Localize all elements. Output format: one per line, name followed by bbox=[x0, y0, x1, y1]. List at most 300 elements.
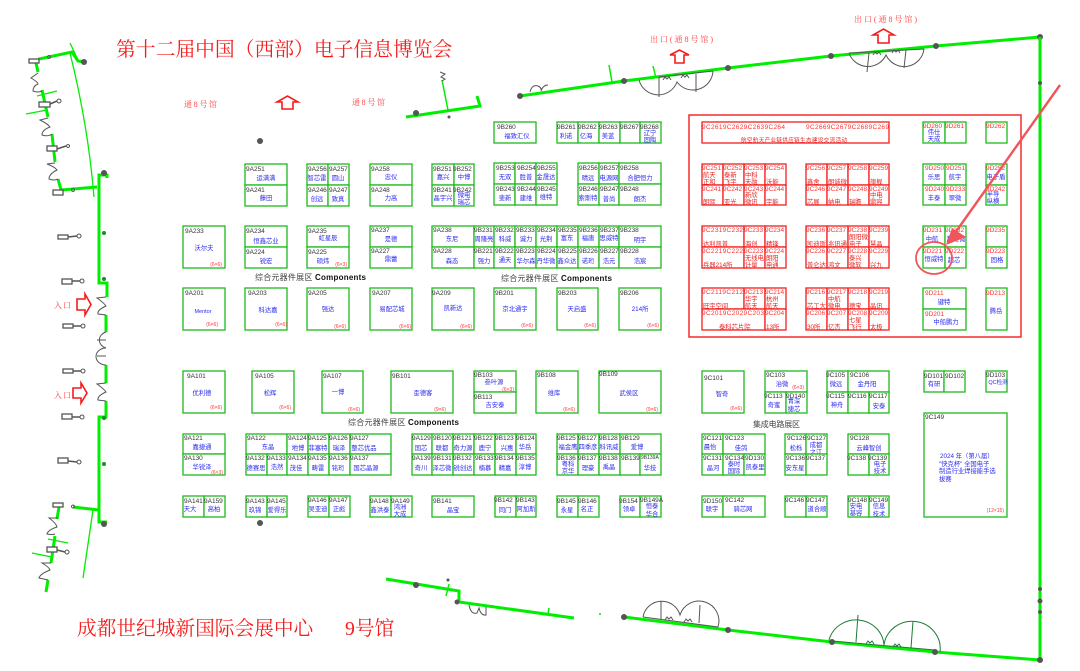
booth 9C253: 天融 bbox=[745, 177, 758, 186]
booth 9C121 bbox=[702, 434, 723, 454]
booth 9B225: 鑫众达 bbox=[558, 256, 577, 265]
booth 9C228: 9C228 bbox=[848, 248, 868, 255]
booth 9B146: 名正 bbox=[581, 504, 593, 513]
booth 9A141: 天大 bbox=[184, 504, 197, 513]
booth 9A143: 9A143 bbox=[246, 498, 265, 505]
booth 9B139A: 华技 bbox=[644, 463, 657, 472]
booth 9C254: 沃能 bbox=[766, 177, 779, 186]
booth 9D140: 捷芯 bbox=[788, 404, 800, 413]
booth 9C106 bbox=[848, 371, 889, 392]
booth 9C149 competition: 拔赛 bbox=[939, 474, 952, 483]
booth 9C238: 9C238 bbox=[848, 227, 868, 234]
booth 9C261-9C269: 9C2669C2679C2689C269 bbox=[806, 124, 889, 131]
booth 9B113 bbox=[474, 392, 516, 413]
booth 9C252: 9C252 bbox=[723, 165, 743, 172]
booth 9C138: 9C138 bbox=[847, 455, 867, 462]
booth 9A258 bbox=[370, 164, 412, 185]
dock doors bbox=[29, 56, 85, 554]
booth 9D262: 9D262 bbox=[986, 123, 1006, 130]
booth 9C231-9C232: 达利凯普 bbox=[703, 239, 728, 248]
booth 9B203: 天启盛 bbox=[568, 304, 586, 313]
booth 9B134: 9B134 bbox=[495, 455, 514, 462]
booth 9A205: 强达 bbox=[322, 304, 335, 313]
booth 9A105: (6×6) bbox=[279, 405, 291, 411]
booth 9C207: 亿杰 bbox=[828, 322, 841, 331]
booth 9C106: 9C106 bbox=[850, 372, 870, 379]
booth 9A224: 9A224 bbox=[246, 249, 265, 256]
booth 9C239: 9C239 bbox=[869, 227, 889, 234]
booth 9A256 bbox=[307, 164, 328, 185]
booth 9B241: 晶宇兴 bbox=[434, 193, 452, 202]
booth 9B253: 9B253 bbox=[496, 165, 515, 172]
booth 9C242: 9C242 bbox=[723, 186, 743, 193]
booth 9D252 bbox=[986, 164, 1007, 185]
booth 9B252 bbox=[453, 164, 474, 185]
booth 9B244: 建维 bbox=[520, 193, 533, 202]
booth 9B243 bbox=[494, 184, 515, 205]
booth 9A129: 国芯 bbox=[415, 443, 427, 452]
booth 9A107: 9A107 bbox=[323, 373, 342, 380]
booth 9B127 bbox=[578, 434, 599, 454]
booth 9A237 bbox=[370, 226, 412, 247]
booth 9A143 bbox=[246, 496, 267, 517]
callout: highlight circle bbox=[916, 242, 952, 274]
booth 9A107: 一博 bbox=[332, 387, 345, 396]
booth 9B101: 歪德客 bbox=[414, 388, 433, 397]
booth 9B252: 9B252 bbox=[453, 166, 472, 173]
booth 9B103: 叁叶源 bbox=[485, 377, 504, 386]
booth 9A247: 9A247 bbox=[329, 187, 348, 194]
booth 9A233: 沃尔夫 bbox=[195, 243, 214, 252]
booth 9A148: 9A148 bbox=[370, 498, 389, 505]
booth 9A238: 东尼 bbox=[446, 234, 458, 243]
booth 9B206: 214所 bbox=[632, 304, 649, 313]
booth 9C229 bbox=[869, 247, 889, 269]
booth 9B146: 9B146 bbox=[578, 498, 597, 505]
booth 9B129: 9B129 bbox=[621, 435, 640, 442]
booth 9A209: 9A209 bbox=[432, 290, 451, 297]
booth 9B109 bbox=[599, 371, 661, 413]
booth 9C115 bbox=[826, 392, 848, 413]
booth 9B143: 9B143 bbox=[516, 497, 535, 504]
booth 9C127 bbox=[806, 434, 827, 456]
booth 9C103 bbox=[765, 371, 807, 392]
booth 9B125: 福金鹰 bbox=[559, 442, 577, 451]
booth 9C139: 电子 bbox=[874, 459, 886, 468]
booth 9B238 bbox=[619, 226, 661, 247]
booth 9B235: 9B235 bbox=[558, 227, 577, 234]
booth 9C241: 9C241 bbox=[702, 186, 722, 193]
booth 9A256: 9A256 bbox=[308, 166, 327, 173]
booth 9C248: 瑞瞻 bbox=[849, 197, 862, 206]
zone label: components upper centre: 综合元器件展区 Components bbox=[501, 273, 613, 283]
booth 9B242: 9B242 bbox=[453, 187, 472, 194]
booth 9C149 competition: (12×15) bbox=[987, 508, 1004, 514]
booth 9D221: 恒威特 bbox=[925, 254, 944, 263]
booth 9C121: 9C121 bbox=[703, 435, 723, 442]
booth 9B227: 浩元 bbox=[603, 256, 616, 265]
booth 9B121: 9B121 bbox=[453, 435, 472, 442]
exit arrow 2 bbox=[854, 14, 917, 43]
booth 9C252 bbox=[723, 164, 744, 186]
booth 9B201: 9B201 bbox=[495, 290, 514, 297]
booth 9C257: 9C257 bbox=[827, 165, 847, 172]
booth 9D261 bbox=[945, 122, 966, 143]
booth 9B237: 思威特 bbox=[600, 233, 619, 242]
booth 9A132: 9A132 bbox=[246, 455, 265, 462]
booth 9D223 bbox=[986, 247, 1007, 268]
booth 9C219 bbox=[869, 288, 889, 310]
booth 9C149 competition bbox=[924, 413, 1007, 517]
booth 9A251: 运满满 bbox=[257, 173, 275, 182]
booth 9C204 bbox=[765, 309, 786, 331]
booth 9B268: 辽宁 bbox=[644, 128, 656, 137]
booth 9D221 bbox=[923, 247, 945, 268]
booth 9A258: 忠仪 bbox=[385, 173, 398, 181]
booth 9B138: 禹晶 bbox=[603, 463, 615, 471]
booth 9A235: 9A235 bbox=[308, 228, 327, 235]
booth 9C238: 朗阳微 bbox=[849, 232, 869, 241]
booth 9B243: 斐新 bbox=[499, 193, 512, 202]
booth 9B231 bbox=[474, 226, 494, 247]
booth 9B254 bbox=[515, 163, 536, 184]
booth 9C261-9C269: 9C2619C2629C2639C264 bbox=[702, 124, 785, 131]
booth 9C227 bbox=[827, 247, 848, 269]
booth 9B136 bbox=[557, 454, 578, 475]
booth 9C216 bbox=[806, 288, 827, 310]
booth 9A139 bbox=[412, 454, 432, 475]
booth 9B206 bbox=[619, 288, 661, 330]
booth 9C211-9C212: 旺宇空间 bbox=[703, 301, 728, 310]
booth 9C229: 兴九 bbox=[870, 260, 883, 269]
booth 9B113: 吉安泰 bbox=[486, 400, 505, 409]
booth 9C204: 9C204 bbox=[765, 310, 785, 317]
booth 9B256 bbox=[578, 163, 599, 184]
panel: components zone upper centre bbox=[474, 122, 661, 330]
booth 9C229: 9C229 bbox=[869, 248, 889, 255]
booth 9C148: 安电 bbox=[850, 501, 863, 510]
hall walls: bottom bbox=[386, 578, 1043, 663]
booth 9A251 bbox=[245, 164, 287, 185]
booth 9C249: 鼎容 bbox=[870, 197, 883, 206]
passage label to hall 8: 通8号馆 bbox=[352, 97, 385, 107]
booth 9C218: 德宝 bbox=[849, 301, 862, 310]
booth 9C149 competition: 制造行业焊接能手选 bbox=[939, 466, 996, 475]
booth 9C101: 智奇 bbox=[716, 389, 728, 398]
booth 9B268: 9B268 bbox=[640, 124, 659, 131]
booth 9B238: 明宇 bbox=[634, 235, 646, 244]
booth 9A201: Mentor bbox=[194, 309, 212, 315]
booth 9C139: 9C139 bbox=[868, 455, 888, 462]
booth 9D211: 9D211 bbox=[925, 290, 944, 297]
booth 9C234: 精锋 bbox=[766, 239, 779, 248]
booth 9B225 bbox=[557, 247, 578, 268]
booth 9D201: 9D201 bbox=[925, 311, 945, 318]
booth 9C149 small: 信息 bbox=[873, 501, 885, 510]
passage arrow to hall 8 bbox=[184, 96, 298, 109]
panel: integrated circuit zone bbox=[702, 371, 1008, 518]
booth 9A101 bbox=[183, 371, 225, 413]
booth 9D140: 青深 bbox=[788, 396, 800, 405]
booth 9C243 bbox=[744, 185, 765, 206]
booth 9B235 bbox=[557, 226, 578, 247]
booth 9A130: (6×3) bbox=[211, 470, 223, 476]
booth 9B222: 9B222 bbox=[495, 248, 514, 255]
booth 9C136: 9C136 bbox=[786, 455, 806, 462]
booth 9C241 bbox=[702, 185, 723, 206]
booth 9B145: 9B145 bbox=[557, 498, 576, 505]
booth 9C116: 9C116 bbox=[848, 393, 867, 400]
booth 9B139A: 9B139A bbox=[641, 455, 659, 461]
booth 9B238: 9B238 bbox=[620, 227, 639, 234]
booth 9D262 bbox=[986, 122, 1007, 143]
booth 9A228 bbox=[432, 247, 474, 268]
booth 9A141: 9A141 bbox=[184, 498, 203, 505]
booth 9A137: 9A137 bbox=[350, 455, 369, 462]
booth 9A225: 硕炜 bbox=[317, 256, 329, 265]
booth 9D222: 9D222 bbox=[945, 248, 965, 255]
booth 9C256: 9C256 bbox=[806, 165, 826, 172]
booth 9B154: 9B154 bbox=[619, 498, 638, 505]
booth 9A101: 9A101 bbox=[187, 373, 206, 380]
booth 9C216: 9C216 bbox=[806, 289, 826, 296]
booth 9A251: 9A251 bbox=[246, 166, 265, 173]
booth 9B257: 电源网 bbox=[600, 173, 618, 182]
entrance arrow 1: 入口 bbox=[54, 300, 71, 310]
booth 9B245: 9B245 bbox=[537, 186, 556, 193]
booth 9C139: 技术 bbox=[874, 466, 887, 475]
booth 9C123: 9C123 bbox=[725, 435, 745, 442]
booth 9B133: 9B133 bbox=[475, 455, 494, 462]
booth 9C233 bbox=[744, 226, 765, 248]
booth 9C136: 安东星 bbox=[786, 463, 804, 472]
booth 9B129: 爱博 bbox=[631, 442, 644, 451]
panel: components zone upper left bbox=[183, 164, 474, 330]
booth 9C214 bbox=[765, 288, 786, 310]
booth 9C206: 9C206 bbox=[806, 310, 826, 317]
booth 9C224: 电通 bbox=[766, 260, 779, 269]
booth 9A248 bbox=[370, 185, 412, 206]
booth 9A139: 奇川 bbox=[415, 463, 427, 472]
booth 9C213: 9C213 bbox=[744, 289, 764, 296]
booth 9B108: (6×6) bbox=[563, 407, 575, 413]
booth 9D140 bbox=[786, 392, 807, 413]
booth 9C252: 飞宇 bbox=[724, 177, 737, 186]
booth 9A130: 华锐泽 bbox=[193, 462, 212, 471]
swing doors: top right bbox=[849, 49, 924, 72]
booth 9C134: 国际 bbox=[728, 466, 740, 475]
booth 9B267: 9B267 bbox=[620, 124, 639, 131]
booth 9C256: 鑫舍 bbox=[807, 177, 820, 186]
booth 9C213: 华宇 bbox=[745, 294, 758, 303]
booth 9A224 bbox=[245, 247, 287, 268]
booth 9A135: 畴雷 bbox=[312, 463, 324, 472]
booth 9C227: 9C227 bbox=[827, 248, 847, 255]
booth 9B139: 9B139 bbox=[621, 455, 640, 462]
booth 9B244 bbox=[515, 184, 536, 205]
booth 9C249: 9C249 bbox=[869, 186, 889, 193]
booth 9C113 bbox=[764, 392, 786, 413]
booth 9C214: 9C214 bbox=[765, 289, 785, 296]
booth 9D102: 9D102 bbox=[945, 373, 965, 380]
booth 9C217: 中航 bbox=[828, 294, 841, 303]
booth 9D251 bbox=[945, 164, 966, 185]
booth 9A159: 高柏 bbox=[208, 504, 220, 513]
booth 9C131: 9C131 bbox=[703, 455, 723, 462]
booth 9B241 bbox=[432, 185, 454, 206]
booth 9B142 bbox=[494, 496, 516, 517]
booth 9A121 bbox=[183, 434, 225, 454]
booth 9B142: 同门 bbox=[499, 505, 511, 514]
booth 9A257: 9A257 bbox=[329, 166, 348, 173]
booth 9C219: 9C219 bbox=[869, 289, 889, 296]
booth 9B203: 9B203 bbox=[558, 290, 577, 297]
booth 9C105: 9C105 bbox=[826, 372, 846, 379]
booth 9C248: 9C248 bbox=[848, 186, 868, 193]
booth 9C123: 佳鸽 bbox=[735, 443, 747, 452]
booth 9A238 bbox=[432, 226, 474, 247]
booth 9C227: 鸿文 bbox=[828, 260, 841, 269]
booth 9B123: 9B123 bbox=[495, 435, 514, 442]
booth 9B256: 9B256 bbox=[579, 165, 598, 172]
booth 9B260: 9B260 bbox=[497, 124, 516, 131]
booth 9B251: 9B251 bbox=[433, 166, 452, 173]
booth 9A258: 9A258 bbox=[371, 166, 390, 173]
booth 9C258 bbox=[848, 164, 869, 185]
booth 9D250: 乐思 bbox=[928, 172, 940, 181]
booth 9A247: 致真 bbox=[332, 194, 344, 203]
booth 9B247 bbox=[599, 184, 619, 205]
booth 9B136: 京华 bbox=[562, 466, 574, 475]
booth 9D130 bbox=[744, 454, 765, 475]
booth 9A135 bbox=[308, 454, 329, 475]
booth 9B124 bbox=[516, 434, 536, 454]
booth 9B223 bbox=[515, 247, 536, 268]
booth 9C127: 9C127 bbox=[807, 435, 827, 442]
booth 9A129: 9A129 bbox=[412, 435, 431, 442]
booth 9C208: 七星 bbox=[849, 315, 862, 324]
booth 9B257: 9B257 bbox=[600, 165, 619, 172]
booth 9A124: 地博 bbox=[292, 443, 305, 452]
booth 9D101: 9D101 bbox=[924, 373, 944, 380]
booth 9D232: 9D232 bbox=[945, 227, 965, 234]
booth 9B133 bbox=[474, 454, 495, 475]
hall walls: top bbox=[406, 34, 1043, 118]
booth 9C242 bbox=[723, 185, 744, 206]
booth 9B257 bbox=[599, 163, 619, 184]
booth 9D240: 丰泰 bbox=[928, 193, 941, 202]
booth 9B228: 浩宸 bbox=[634, 256, 647, 265]
booth 9C224: 9C224 bbox=[765, 248, 785, 255]
booth 9C201-9C203: 泰科芯片院 bbox=[719, 322, 751, 331]
booth 9A227 bbox=[370, 247, 412, 268]
booth 9B226: 9B226 bbox=[579, 248, 598, 255]
booth 9C218: 9C218 bbox=[848, 289, 868, 296]
panel: components zone lower centre bbox=[474, 371, 664, 518]
booth 9B236 bbox=[578, 226, 599, 247]
booth 9C105: 微远 bbox=[830, 379, 843, 388]
booth 9D251: 9D251 bbox=[946, 165, 966, 172]
booth 9B261: 利诺 bbox=[560, 131, 573, 140]
booth 9C213: 航天 bbox=[745, 301, 758, 310]
booth 9A227: 鼎蕾 bbox=[385, 254, 397, 263]
booth 9B232 bbox=[494, 226, 515, 247]
booth 9A125: 9A125 bbox=[308, 435, 327, 442]
booth 9A130 bbox=[183, 454, 225, 476]
booth 9C101: 9C101 bbox=[704, 375, 724, 382]
booth 9A234 bbox=[245, 226, 287, 247]
booth 9C241: 朗际 bbox=[703, 197, 716, 206]
booth 9B222 bbox=[494, 247, 515, 268]
exit arrow 1 bbox=[650, 34, 713, 63]
booth 9B132: 9B132 bbox=[453, 455, 472, 462]
booth 9C103: 治微 bbox=[776, 379, 789, 388]
booth 9C259 bbox=[869, 164, 889, 186]
booth 9B221: 9B221 bbox=[474, 248, 493, 255]
booth 9B231: 周隆亮 bbox=[475, 234, 493, 243]
booth 9B138: 9B138 bbox=[599, 455, 618, 462]
booth 9C257 bbox=[827, 164, 848, 186]
booth 9D150 bbox=[702, 496, 723, 517]
booth 9C247 bbox=[827, 185, 848, 206]
booth 9C226: 9C226 bbox=[806, 248, 826, 255]
booth 9C142 bbox=[723, 496, 765, 517]
booth 9B206: 9B206 bbox=[620, 290, 639, 297]
booth 9B136: 9B136 bbox=[557, 455, 576, 462]
booth 9B268: 固陶 bbox=[644, 135, 656, 144]
booth 9A248: 9A248 bbox=[371, 187, 390, 194]
booth 9D222: 超芯 bbox=[948, 255, 960, 264]
booth 9D140: 9D140 bbox=[786, 393, 806, 400]
booth 9B134: 精嘉 bbox=[499, 463, 511, 472]
booth 9D150: 9D150 bbox=[703, 498, 723, 505]
booth 9A146: 9A146 bbox=[308, 497, 327, 504]
booth 9D240 bbox=[923, 185, 945, 205]
booth 9A147: 正彪 bbox=[333, 504, 346, 513]
booth 9B254: 胜普 bbox=[520, 172, 532, 181]
booth 9A207: 9A207 bbox=[372, 290, 391, 297]
booth 9B136: 粤科 bbox=[562, 459, 575, 468]
booth 9B248 bbox=[619, 184, 661, 205]
booth 9B101 bbox=[391, 371, 453, 413]
booth 9B122: 9B122 bbox=[474, 435, 493, 442]
title: 第十二届中国（西部）电子信息博览会 bbox=[116, 39, 453, 61]
booth 9B237 bbox=[599, 226, 619, 247]
booth 9A149: 大成 bbox=[394, 509, 407, 518]
booth 9A149: 9A149 bbox=[391, 498, 410, 505]
booth 9C127: 之江 bbox=[810, 447, 823, 456]
booth 9B225: 9B225 bbox=[558, 248, 577, 255]
booth 9B228: 9B228 bbox=[620, 248, 639, 255]
booth 9A133: 9A133 bbox=[267, 455, 286, 462]
booth 9B263: 美蓝 bbox=[602, 131, 615, 140]
booth 9C207: 9C207 bbox=[827, 310, 847, 317]
booth 9A136: 9A136 bbox=[329, 455, 348, 462]
booth 9B236: 9B236 bbox=[579, 227, 598, 234]
booth 9D260: 天成 bbox=[928, 134, 941, 143]
booth 9B143: 阿加斯 bbox=[517, 504, 536, 513]
booth 9B248: 9B248 bbox=[620, 186, 639, 193]
booth 9B133: 楠慕 bbox=[479, 463, 492, 472]
booth 9A146: 吴亚迪 bbox=[309, 504, 328, 513]
booth 9B231: 9B231 bbox=[474, 227, 493, 234]
booth 9B145 bbox=[557, 496, 578, 517]
booth 9B122: 鹿宁 bbox=[479, 443, 491, 452]
booth 9D103 bbox=[986, 371, 1008, 392]
booth 9A207: (6×6) bbox=[399, 324, 411, 330]
booth 9A105: 松辉 bbox=[264, 388, 277, 397]
booth 9C211-9C212: 9C2119C212 bbox=[702, 289, 743, 296]
